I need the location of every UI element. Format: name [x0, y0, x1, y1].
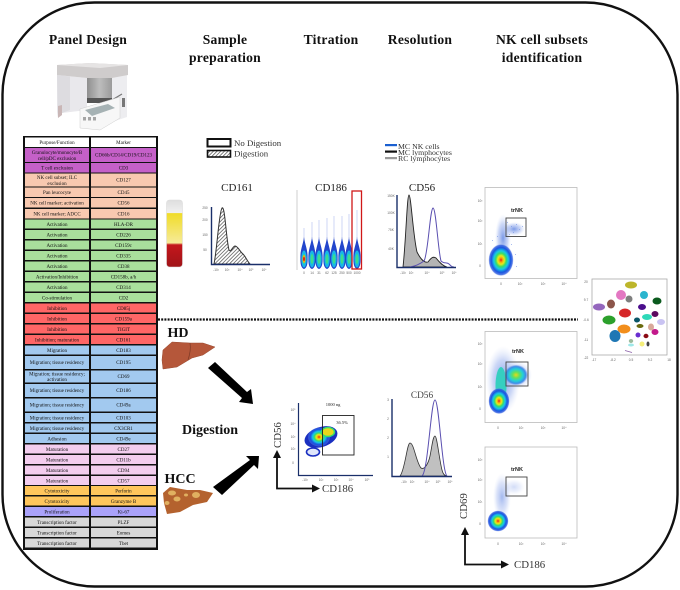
density plot: CD56 vs CD186	[291, 402, 373, 482]
rows: cytotoxicity	[25, 486, 156, 506]
rows: maturation: CD11b	[116, 458, 131, 464]
chart: CD56 histogram top: -10²	[400, 271, 406, 275]
density plot: trNK HCC: 10²	[519, 542, 523, 546]
chart: tSNE clusters: 9.7	[584, 298, 588, 302]
axis arrows: CD69 vs CD186: CD186	[514, 559, 546, 571]
chart title: CD56	[411, 391, 433, 401]
rows: activation: Activation	[46, 254, 68, 260]
chart: CD186 titration violins: 31	[317, 271, 321, 275]
rows: inhibition: CD161	[116, 338, 131, 344]
density plot: trNK top: 10⁴	[562, 282, 567, 286]
rows: NK lineage: CD56	[118, 202, 130, 206]
arrow: HCC to plot	[213, 456, 259, 495]
chart: CD56 histogram bottom: 10³	[410, 480, 414, 484]
rows: migration: Migration	[47, 349, 67, 354]
rows: NK lineage: CD45	[118, 191, 130, 196]
rows: transcription factors	[25, 518, 156, 548]
rows: activation: Activation	[46, 244, 68, 249]
chart: CD161 histogram: 10⁶	[262, 268, 267, 272]
rows: proliferation: Ki-67	[118, 510, 130, 516]
rows: inhibition: Inhibition	[47, 318, 67, 322]
chart: CD56 histogram bottom: 10⁶	[448, 480, 453, 484]
density plot: trNK top: 10²	[518, 282, 522, 286]
rows: NK lineage: Pan leucocyte	[43, 191, 72, 196]
chart: CD161 histogram: 250	[202, 206, 208, 210]
label: HD: HD	[168, 326, 188, 341]
table header: Purpose/Function	[39, 141, 75, 146]
density plot: trNK top: 10²	[478, 219, 482, 223]
rows: inhibition: Inhibition	[47, 307, 67, 312]
density plot: trNK HCC: 10⁴	[562, 542, 567, 546]
density plot: trNK top: 10¹	[478, 242, 482, 246]
density plot: trNK HCC: 10³	[541, 542, 545, 546]
rows: inhibition: CD85j	[117, 307, 130, 312]
density plot: trNK HD	[478, 332, 577, 430]
rows: exclusion: Granulocyte/monocyte/B	[32, 151, 83, 156]
rows: inhibition: CD159a	[115, 318, 133, 322]
density plot: CD56 vs CD186: -10²	[302, 478, 308, 482]
density plot: CD56 vs CD186: 10⁵	[365, 478, 370, 482]
chart: tSNE clusters: -11	[584, 338, 588, 342]
rows: NK lineage: exclusion	[47, 182, 67, 187]
legend: cell populations: MC lymphocytes	[398, 148, 452, 157]
rows: activation: Activation	[46, 223, 68, 228]
chart: CD56 histogram bottom: 3	[387, 398, 389, 402]
rows: cytotoxicity: Cytotoxicity	[44, 490, 70, 494]
density plot: trNK HD: trNK	[512, 349, 524, 355]
rows: maturation: CD57	[118, 480, 130, 484]
heading: Resolution: Resolution	[388, 32, 452, 47]
heading: Sample preparation: preparation	[189, 50, 261, 65]
chart: CD186 titration violins: 250	[339, 271, 345, 275]
table: panel markers	[23, 136, 158, 550]
chart: CD56 histogram top: 10⁴	[425, 271, 430, 275]
rows: activation: CD226	[116, 234, 131, 238]
rows: NK lineage: NK cell subset; ILC	[37, 176, 78, 181]
chart title: CD56	[409, 182, 436, 194]
chart: tSNE clusters: -22	[584, 356, 589, 360]
axis arrows: CD56 vs CD186: CD186	[322, 483, 354, 495]
density plot: trNK top: 0	[479, 264, 481, 268]
rows: transcription factors: PLZF	[118, 521, 130, 526]
heading: Panel Design: Panel Design	[49, 32, 127, 47]
arrow: HD to plot	[208, 362, 253, 404]
chart: CD56 histogram bottom: 2	[387, 417, 389, 421]
axis arrows: CD69 vs CD186: CD69	[458, 493, 470, 519]
density plot: CD56 vs CD186: 1000 ng	[326, 402, 341, 407]
chart: CD161 histogram: 10³	[225, 268, 229, 272]
density plot: CD56 vs CD186: 10²	[319, 478, 323, 482]
gate	[506, 477, 527, 496]
density plot: trNK HCC: 10²	[478, 478, 482, 482]
chart: CD56 histogram top: 40K	[388, 247, 395, 251]
density plot: trNK HCC: 10³	[478, 458, 482, 462]
rows: transcription factors: Transcription factor	[37, 521, 77, 526]
rows: migration: CD49a	[116, 404, 131, 408]
chart: CD56 histogram top: 150K	[387, 194, 396, 198]
legend: cell populations: RC lymphocytes	[398, 154, 450, 163]
rows: migration: Migration; tissue residency	[30, 427, 85, 432]
density plot: trNK top: trNK	[511, 208, 523, 214]
rows: inhibition: Inhibition; maturation	[35, 338, 80, 344]
chart: CD56 histogram bottom: -10²	[401, 480, 407, 484]
chart title: CD161	[221, 182, 253, 194]
density plot: trNK HD: 10³	[541, 426, 545, 430]
rows: exclusion: CD3	[119, 166, 129, 172]
rows: activation: CD2	[119, 296, 129, 302]
legend: digestion: Digestion	[234, 148, 269, 158]
rows: migration: CD195	[116, 361, 131, 366]
density plot: trNK top: 10³	[541, 282, 545, 286]
chart: CD56 histogram top: 10³	[409, 271, 413, 275]
rows: transcription factors: Tbet	[119, 542, 129, 547]
rows: migration: Migration; tissue residency	[30, 416, 85, 422]
gate	[322, 416, 354, 455]
chart: CD161 histogram	[202, 182, 270, 272]
icon: HCC liver	[163, 487, 213, 514]
rows: migration: Migration; tissue residency;	[29, 372, 85, 378]
heading: Titration: Titration	[304, 32, 359, 47]
rows: activation: Activation	[46, 286, 68, 291]
rows: maturation: Maturation	[46, 469, 69, 474]
rows: migration: CX3CR1	[114, 427, 133, 432]
chart: CD161 histogram: 200	[202, 218, 208, 222]
rows: activation: Activation	[46, 234, 68, 238]
rows: migration: CD49e	[116, 438, 131, 442]
density plot: trNK HCC: 0	[497, 542, 499, 546]
chart: CD186 titration violins: 62	[325, 271, 329, 275]
chart: CD186 titration violins: 0	[303, 271, 305, 275]
density plot: CD56 vs CD186: 10³	[334, 478, 338, 482]
density plot: CD56 vs CD186: 36.5%	[336, 420, 348, 425]
axis arrows: CD56 vs CD186: CD56	[272, 422, 284, 448]
density plot: CD56 vs CD186: 10²	[291, 447, 295, 451]
chart title: CD186	[315, 182, 347, 194]
chart: CD56 histogram top: 100K	[387, 211, 396, 215]
chart: CD56 histogram bottom: 10⁵	[436, 480, 441, 484]
rows: exclusion: T cell exclusion	[41, 166, 73, 172]
rows: activation: CD158b, a/h	[111, 276, 137, 280]
chart: tSNE clusters: 0.5	[629, 358, 633, 362]
chart: CD56 histogram bottom: 1	[387, 455, 389, 459]
rows: exclusion	[25, 148, 156, 172]
legend: cell populations	[385, 142, 452, 163]
table header: Marker	[116, 141, 131, 146]
axis arrows: CD56 vs CD186	[272, 422, 354, 495]
divider: dotted line	[158, 318, 578, 321]
density plot: trNK HCC: 0	[479, 522, 481, 526]
legend: digestion	[208, 138, 282, 158]
legend: digestion: No Digestion	[234, 138, 282, 148]
chart: CD161 histogram: -10²	[213, 268, 219, 272]
chart: CD161 histogram: 10⁵	[249, 268, 254, 272]
rows: migration: activation	[47, 378, 67, 383]
rows: migration	[25, 346, 156, 443]
density plot: trNK HCC	[478, 447, 577, 546]
rows: inhibition: TIGIT	[117, 328, 130, 333]
density plot: trNK HD: 10²	[519, 426, 523, 430]
chart: CD56 histogram bottom: 10⁴	[425, 480, 430, 484]
icon: healthy liver	[162, 342, 215, 369]
chart: tSNE clusters: 18	[667, 358, 671, 362]
heading: NK cell subsets identification: identification	[502, 50, 582, 65]
rows: transcription factors: Transcription factor	[37, 532, 77, 536]
density plot: trNK HCC: trNK	[511, 467, 523, 473]
rows: maturation	[25, 444, 156, 485]
chart: tSNE clusters: 9.2	[648, 358, 652, 362]
rows: migration: CD69	[118, 375, 130, 380]
density plot: trNK HD: 10²	[478, 362, 482, 366]
density plot: CD56 vs CD186: 10⁴	[291, 422, 296, 426]
rows: NK lineage	[25, 174, 156, 218]
rows: migration: CD186	[116, 389, 131, 394]
rows: migration: Migration; tissue residency	[30, 404, 85, 408]
icon: blood tube	[166, 200, 182, 267]
rows: maturation: Maturation	[46, 448, 69, 453]
rows: NK lineage: CD127	[116, 178, 131, 184]
label: HCC: HCC	[164, 472, 196, 487]
rows: NK lineage: NK cell marker; activation	[30, 202, 84, 206]
rows: proliferation: Proliferation	[44, 510, 70, 516]
rows: maturation: CD27	[118, 448, 130, 453]
density plot: trNK HD: 10⁴	[562, 426, 567, 430]
density plot: trNK HCC: 10¹	[478, 500, 482, 504]
chart: CD186 titration violins: 1000	[353, 271, 361, 275]
rows: proliferation	[25, 507, 156, 516]
chart: CD56 histogram top	[387, 182, 457, 275]
chart: CD56 histogram bottom	[387, 391, 453, 484]
density plot: CD56 vs CD186: 0	[292, 461, 294, 465]
chart: CD186 titration violins: 14	[310, 271, 314, 275]
chart: CD56 histogram top: 10⁶	[452, 271, 457, 275]
rows: activation: CD314	[116, 286, 131, 291]
density plot: trNK HD: 10³	[478, 342, 482, 346]
chart: CD161 histogram: 10⁴	[238, 268, 243, 272]
density plot: trNK HD: 10¹	[478, 385, 482, 389]
legend: cell populations: MC NK cells	[398, 142, 440, 151]
table header	[25, 138, 156, 147]
axis arrows: CD69 vs CD186	[458, 493, 546, 571]
rows: exclusion: cell/pDC exclusion	[38, 157, 77, 162]
chart: CD56 histogram top: 75K	[388, 228, 395, 232]
rows: NK lineage: CD16	[118, 212, 130, 218]
rows: maturation: Maturation	[46, 458, 69, 464]
chart: CD56 histogram top: 10⁵	[440, 271, 445, 275]
rows: activation: CD38	[118, 265, 130, 270]
gate	[506, 362, 528, 386]
chart: tSNE clusters: -17	[592, 358, 597, 362]
chart: tSNE clusters: 20	[584, 280, 588, 284]
rows: inhibition	[25, 304, 156, 344]
rows: cytotoxicity: Perforin	[115, 490, 132, 494]
rows: activation: Activation	[46, 265, 68, 270]
rows: transcription factors: Eomes	[117, 532, 130, 536]
chart: tSNE clusters	[583, 279, 671, 362]
rows: activation: CD159c	[115, 244, 133, 249]
highlight box	[352, 191, 362, 269]
rows: migration: Adhesion	[47, 438, 67, 442]
heading: Sample preparation: Sample	[203, 32, 247, 47]
chart: CD161 histogram: 150	[202, 233, 208, 237]
density plot: trNK top: 0	[500, 282, 502, 286]
density plot: CD56 vs CD186: 10⁵	[291, 408, 296, 412]
density plot: CD56 vs CD186: 10³	[291, 435, 295, 439]
chart: tSNE clusters: -8.2	[610, 358, 616, 362]
rows: transcription factors: Transcription factor	[37, 542, 77, 547]
rows: NK lineage: NK cell marker; ADCC	[33, 212, 81, 218]
density plot: trNK top: 10³	[478, 199, 482, 203]
rows: migration: Migration; tissue residency	[30, 389, 85, 394]
rows: migration: Migration; tissue residency	[30, 361, 85, 366]
chart: CD56 histogram bottom: 2	[387, 436, 389, 440]
chart: CD186 titration violins	[297, 182, 362, 275]
rows: migration: CD183	[116, 349, 131, 354]
chart: CD186 titration violins: 125	[331, 271, 337, 275]
rows: exclusion: CD66b/CD14/CD19/CD123	[95, 154, 152, 158]
rows: activation: HLA-DR	[114, 223, 134, 228]
chart: tSNE clusters: -0.6	[583, 318, 589, 322]
density plot: trNK HD: 0	[497, 426, 499, 430]
rows: maturation: CD94	[118, 469, 130, 474]
rows: activation: Activation/Inhibition	[36, 276, 79, 280]
heading: NK cell subsets identification: NK cell subsets	[496, 32, 588, 47]
density plot: trNK top	[478, 188, 577, 286]
rows: activation	[25, 220, 156, 302]
icon: flow cytometer instrument	[57, 63, 128, 130]
density plot: trNK HD: 0	[479, 407, 481, 411]
rows: migration: CD103	[116, 416, 131, 422]
rows: cytotoxicity: Cytotoxicity	[44, 500, 70, 505]
rows: maturation: Maturation	[46, 480, 69, 484]
rows: activation: CD335	[116, 254, 131, 260]
chart: CD186 titration violins: 500	[346, 271, 352, 275]
density plot: CD56 vs CD186: 10⁴	[349, 478, 354, 482]
label: Digestion: Digestion	[182, 423, 238, 438]
rows: activation: Co-stimulation	[42, 296, 72, 302]
chart: CD161 histogram: 50	[203, 248, 207, 252]
rows: inhibition: Inhibition	[47, 328, 67, 333]
rows: cytotoxicity: Granzyme B	[111, 500, 137, 505]
gate	[506, 218, 526, 236]
